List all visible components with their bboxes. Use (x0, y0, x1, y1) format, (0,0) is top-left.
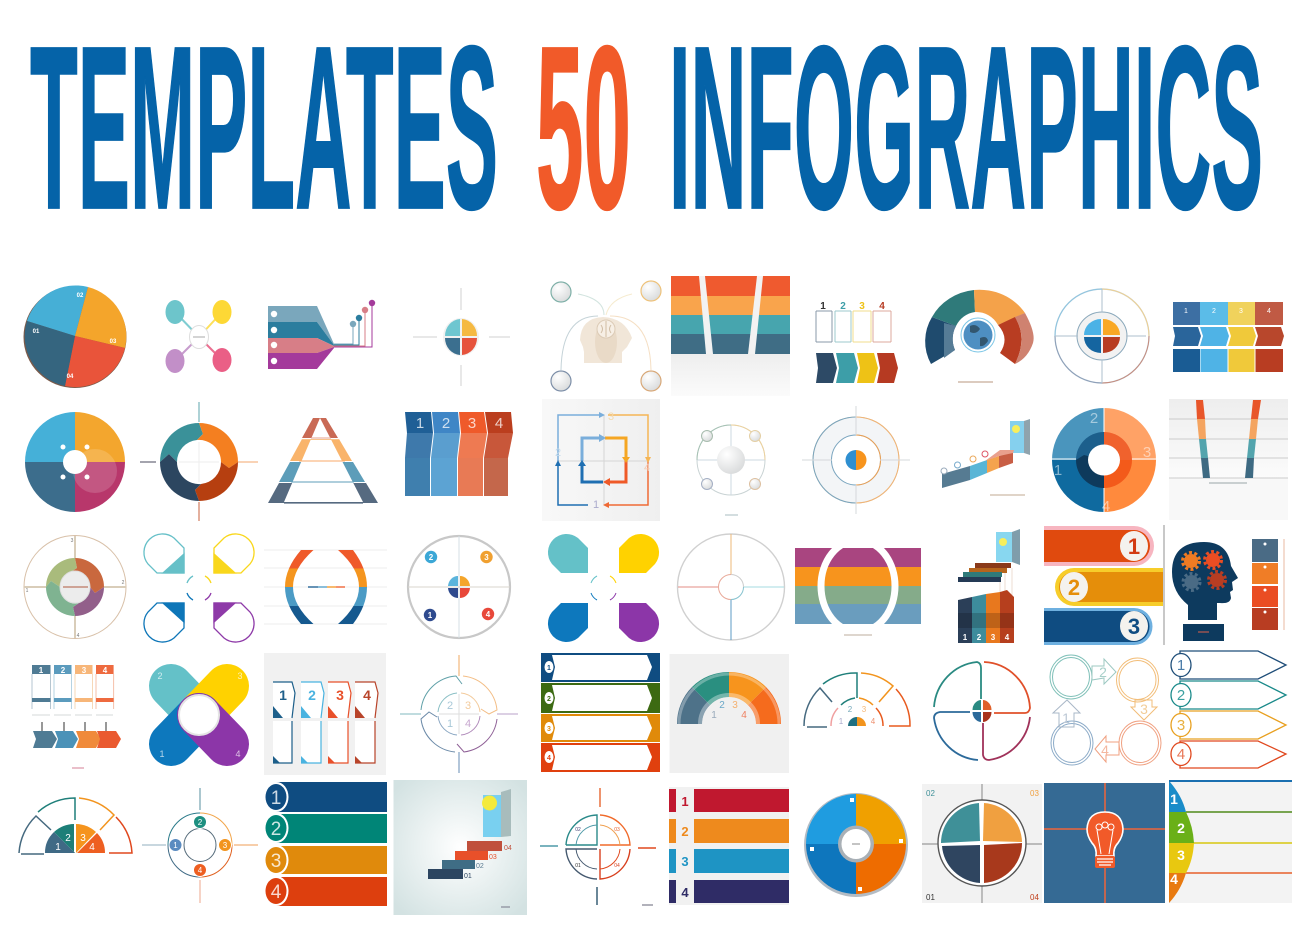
template 36: semicircle gauge on grey panel (670, 654, 789, 773)
template 24: large circle with numbered dots: 2 (429, 553, 434, 562)
template 40: four outlined pentagon labels: 2 (1177, 687, 1185, 704)
template 31: numbered table above arrows: 1 (39, 666, 44, 675)
template 19: two-tier donut with arrows: 4 (1102, 498, 1110, 515)
template 37: outline arch with mini semicircle: 1 (839, 717, 844, 726)
template 29: three rounded banners with numbered circles: 2 (1068, 575, 1080, 600)
template 46: four coloured bars with number column: 2 (681, 824, 689, 839)
template 34: segmented outline ring: 4 (465, 718, 471, 730)
template 16: ring with four small nodes (697, 425, 765, 515)
template 12: donut ring with cross lines (140, 402, 258, 521)
template 32: coloured X with white hub: 2 (157, 671, 163, 681)
template 44: staircase toward sunlit door on mist panel (394, 780, 527, 915)
template 45: split target with four cross bars: 02 (575, 827, 581, 833)
template 5: twin heads with brain and four nodes (551, 281, 661, 391)
template 34: segmented outline ring: 2 (447, 700, 453, 712)
template 6: four stripes with slanted gaps (671, 276, 790, 396)
template 43: four solid bars with numbered round tabs: 3 (271, 851, 281, 872)
template 26: outline circle with hub and spokes (678, 534, 784, 640)
template 15: square arrow loop panel: 4 (644, 462, 650, 474)
template 29: three rounded banners with numbered circles (1044, 525, 1164, 645)
template 34: segmented outline ring: 3 (465, 700, 471, 712)
template 42: thin ring with four numbered nodes (142, 788, 258, 903)
template 31: numbered table above arrows: 3 (82, 666, 87, 675)
template 42: thin ring with four numbered nodes: 4 (198, 866, 203, 875)
template 29: three rounded banners with numbered circles: 1 (1128, 534, 1140, 559)
template 41: filled semicircle inside outline arch (19, 798, 132, 854)
template 32: coloured X with white hub (157, 671, 243, 759)
template 22: outlined teardrops with corner triangles (144, 534, 254, 642)
template 21: outlined circle with muted donut (24, 536, 126, 639)
template 24: large circle with numbered dots: 1 (428, 611, 433, 620)
template 1: pie chart with curved slices: 01 (33, 329, 40, 335)
template 7: numbered columns above chevrons: 2 (840, 301, 846, 312)
template 7: numbered columns above chevrons (816, 301, 898, 383)
template 46: four coloured bars with number column: 1 (681, 794, 689, 809)
template 33: four notched pillars on grey panel: 2 (308, 687, 316, 703)
template 31: numbered table above arrows: 4 (103, 666, 108, 675)
template 21: outlined circle with muted donut: 4 (77, 633, 80, 639)
template 7: numbered columns above chevrons: 4 (879, 301, 885, 312)
template 28: stairs and stacked bars with door: 4 (1005, 633, 1010, 642)
template 48: dark-ringed quadrant pie on grey panel: 01 (926, 893, 935, 902)
template 32: coloured X with white hub: 4 (235, 749, 241, 759)
template 31: numbered table above arrows: 2 (61, 666, 66, 675)
template 11: quadrant disc with centre hole (25, 412, 125, 512)
template 10: four-column table with chevron row (1173, 302, 1284, 372)
template 46: four coloured bars with number column: 3 (681, 854, 689, 869)
template 1: pie chart with curved slices: 04 (67, 374, 74, 380)
template 1: pie chart with curved slices: 03 (110, 339, 117, 345)
template 37: outline arch with mini semicircle (804, 673, 910, 727)
template 35: four arrow rows with numbered tabs: 2 (547, 696, 551, 703)
template 20: light ruled panel with two gradient bars (1169, 399, 1288, 520)
template 7: numbered columns above chevrons: 3 (859, 301, 865, 312)
template 24: large circle with numbered dots: 4 (486, 610, 491, 619)
template 50: curved coloured edge with four numbered lines (1169, 780, 1292, 903)
template 32: coloured X with white hub: 3 (237, 671, 243, 681)
template 13: layered pyramid (268, 418, 378, 503)
template 18: ramp toward a door (941, 419, 1030, 495)
template 28: stairs and stacked bars with door: 3 (991, 633, 996, 642)
template 50: curved coloured edge with four numbered lines: 3 (1177, 847, 1185, 863)
template 14: folded numbered columns (405, 412, 513, 496)
template 45: split target with four cross bars (540, 788, 656, 905)
template 39: four double circles linked by arrows: 2 (1099, 664, 1107, 680)
template 49: light bulb on blue panel (1044, 783, 1165, 903)
template 14: folded numbered columns: 3 (468, 415, 476, 432)
template 21: outlined circle with muted donut: 1 (26, 588, 29, 594)
template 37: outline arch with mini semicircle: 3 (862, 705, 867, 714)
template 23: stripes with two coloured brackets (264, 550, 387, 624)
template 31: numbered table above arrows (32, 665, 121, 768)
template 50: curved coloured edge with four numbered lines: 1 (1170, 791, 1178, 807)
template 10: four-column table with chevron row: 1 (1184, 308, 1188, 315)
template 37: outline arch with mini semicircle: 2 (848, 705, 853, 714)
template 35: four arrow rows with numbered tabs: 1 (547, 665, 551, 672)
template 48: dark-ringed quadrant pie on grey panel: 02 (926, 789, 935, 798)
template 7: numbered columns above chevrons: 1 (820, 301, 826, 312)
template 48: dark-ringed quadrant pie on grey panel (922, 784, 1042, 903)
template 45: split target with four cross bars: 04 (614, 863, 620, 869)
template 42: thin ring with four numbered nodes: 2 (198, 818, 203, 827)
template 33: four notched pillars on grey panel: 1 (279, 687, 287, 703)
template 29: three rounded banners with numbered circles: 3 (1128, 614, 1140, 639)
template 30: head silhouette with gears and stack (1172, 539, 1284, 641)
template 42: thin ring with four numbered nodes: 1 (173, 841, 178, 850)
template 39: four double circles linked by arrows (1050, 655, 1161, 765)
template 36: semicircle gauge on grey panel: 3 (732, 700, 738, 711)
template 44: staircase toward sunlit door on mist panel: 01 (464, 873, 472, 880)
template 50: curved coloured edge with four numbered lines: 2 (1177, 820, 1185, 836)
template 19: two-tier donut with arrows (1052, 408, 1156, 515)
template 17: shaded target with half-blue core (802, 406, 910, 514)
template 44: staircase toward sunlit door on mist panel: 02 (476, 863, 484, 870)
template 43: four solid bars with numbered round tabs: 1 (271, 788, 281, 809)
template 45: split target with four cross bars: 03 (614, 827, 620, 833)
template 36: semicircle gauge on grey panel: 1 (711, 710, 717, 721)
template 40: four outlined pentagon labels: 3 (1177, 717, 1185, 734)
template 39: four double circles linked by arrows: 3 (1140, 701, 1148, 717)
template 15: square arrow loop panel (542, 399, 660, 521)
template 24: large circle with numbered dots: 3 (484, 553, 489, 562)
template 44: staircase toward sunlit door on mist panel: 04 (504, 845, 512, 852)
template 40: four outlined pentagon labels (1171, 651, 1286, 768)
template 50: curved coloured edge with four numbered lines: 4 (1170, 871, 1178, 887)
template 43: four solid bars with numbered round tabs: 2 (271, 819, 281, 840)
template 27: stripes behind a white ring (795, 540, 921, 635)
template 10: four-column table with chevron row: 2 (1212, 308, 1216, 315)
template 21: outlined circle with muted donut: 3 (71, 538, 74, 544)
template 43: four solid bars with numbered round tabs: 4 (271, 882, 282, 903)
template 35: four arrow rows with numbered tabs: 3 (547, 726, 551, 733)
template 36: semicircle gauge on grey panel: 2 (719, 700, 725, 711)
template 46: four coloured bars with number column (669, 787, 789, 905)
template 46: four coloured bars with number column: 4 (681, 885, 689, 900)
template 25: solid teardrops with small arcs (548, 534, 659, 642)
template 45: split target with four cross bars: 01 (575, 863, 581, 869)
template 32: coloured X with white hub: 1 (159, 749, 165, 759)
template 28: stairs and stacked bars with door: 2 (977, 633, 982, 642)
template 47: blue and orange disc with hub (804, 793, 908, 897)
template 39: four double circles linked by arrows: 1 (1062, 710, 1070, 726)
template 28: stairs and stacked bars with door: 1 (963, 633, 968, 642)
template 10: four-column table with chevron row: 3 (1239, 308, 1243, 315)
template 38: four curled quadrant outlines with hub (934, 662, 1030, 760)
template 14: folded numbered columns: 4 (495, 415, 503, 432)
template 48: dark-ringed quadrant pie on grey panel: 04 (1030, 893, 1039, 902)
template 37: outline arch with mini semicircle: 4 (871, 717, 876, 726)
template 14: folded numbered columns: 2 (442, 415, 450, 432)
template 33: four notched pillars on grey panel (264, 653, 386, 775)
template 43: four solid bars with numbered round tabs (264, 782, 387, 906)
template 3: funnel bars into lollipop lines (268, 300, 375, 369)
template 41: filled semicircle inside outline arch: 2 (65, 833, 71, 844)
template 24: large circle with numbered dots (408, 536, 510, 638)
template 33: four notched pillars on grey panel: 3 (336, 687, 344, 703)
template 44: staircase toward sunlit door on mist panel: 03 (489, 854, 497, 861)
template 28: stairs and stacked bars with door (958, 529, 1020, 643)
template 42: thin ring with four numbered nodes: 3 (223, 841, 228, 850)
template 8: gauge around a globe (925, 290, 1034, 382)
template 1: pie chart with curved slices: 02 (77, 293, 84, 299)
template 34: segmented outline ring: 1 (447, 718, 453, 730)
template 41: filled semicircle inside outline arch: 1 (55, 842, 61, 853)
template 19: two-tier donut with arrows: 1 (1054, 462, 1062, 479)
template 15: square arrow loop panel: 1 (593, 499, 599, 511)
template 35: four arrow rows with numbered tabs (541, 653, 660, 772)
template 1: pie chart with curved slices (24, 285, 126, 388)
template 48: dark-ringed quadrant pie on grey panel: 03 (1030, 789, 1039, 798)
template 10: four-column table with chevron row: 4 (1267, 308, 1271, 315)
template 35: four arrow rows with numbered tabs: 4 (547, 755, 551, 762)
template 36: semicircle gauge on grey panel: 4 (741, 710, 747, 721)
template 34: segmented outline ring (400, 655, 518, 773)
template 41: filled semicircle inside outline arch: 4 (89, 842, 95, 853)
template 33: four notched pillars on grey panel: 4 (363, 687, 371, 703)
template 39: four double circles linked by arrows: 4 (1101, 742, 1109, 758)
template 41: filled semicircle inside outline arch: 3 (80, 833, 86, 844)
template 14: folded numbered columns: 1 (416, 415, 424, 432)
template 21: outlined circle with muted donut: 2 (122, 580, 125, 586)
template 15: square arrow loop panel: 2 (555, 447, 561, 459)
template 2: four balloons around a ring (166, 300, 232, 373)
template 19: two-tier donut with arrows: 2 (1090, 410, 1098, 427)
template 4: small quadrant circle with cross lines (413, 288, 510, 386)
template 15: square arrow loop panel: 3 (608, 411, 614, 423)
template 40: four outlined pentagon labels: 1 (1177, 657, 1185, 674)
template 9: concentric target with quadrant core (1055, 289, 1149, 383)
template 19: two-tier donut with arrows: 3 (1143, 444, 1151, 461)
template 40: four outlined pentagon labels: 4 (1177, 746, 1185, 763)
